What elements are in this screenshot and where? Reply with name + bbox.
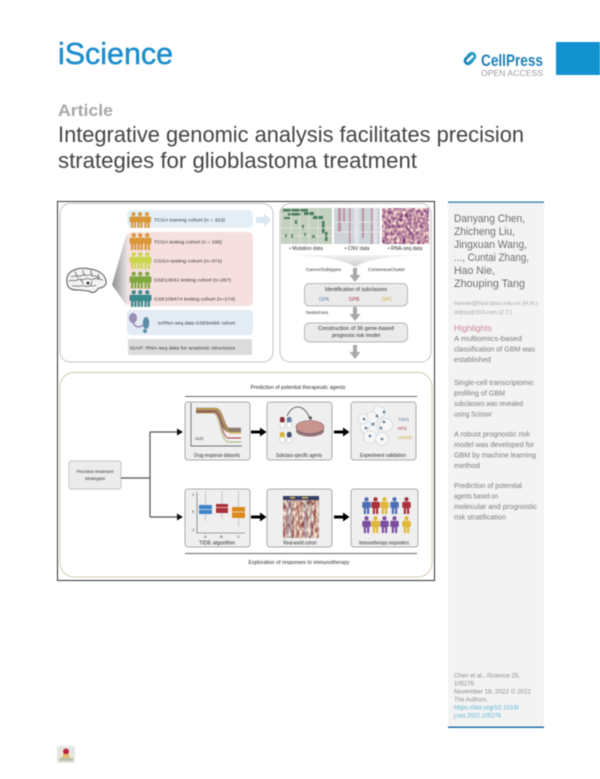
arrow <box>350 307 360 321</box>
TIDE boxplot <box>185 489 250 547</box>
branching connector arrows <box>121 428 183 520</box>
training cohort band <box>127 210 253 228</box>
highlights text: Single-cell transcriptomic <box>454 378 534 387</box>
highlights text: Prediction of potential <box>454 481 522 490</box>
highlights text: established <box>454 355 491 364</box>
scRNA-seq band <box>127 310 253 335</box>
real-world cohort: Real-world cohort <box>284 540 317 546</box>
highlights text: using Scissor <box>454 410 492 418</box>
omics data labels: • Mutation data <box>289 246 323 252</box>
risk model box: prognosis risk model <box>332 333 380 339</box>
block arrow to molecular data <box>256 213 271 227</box>
TIDE boxplot: 0 <box>192 509 195 514</box>
mutation data heatmap <box>281 208 332 244</box>
CellPress open access logo: OPEN ACCESS <box>481 68 543 78</box>
graphical abstract figure <box>58 202 434 580</box>
authors: Jingxuan Wang, <box>454 239 527 251</box>
correspondence emails: ddjtzp@163.com (Z.T.) <box>454 310 512 316</box>
RNA-seq data heatmap <box>382 208 429 244</box>
testing cohorts band: TCGA testing cohort (n = 195) <box>154 240 223 244</box>
title <box>58 122 524 173</box>
authors: Zhicheng Liu, <box>454 226 515 238</box>
title: Integrative genomic analysis facilitates precision <box>58 122 524 147</box>
highlights text: A robust prognostic risk <box>454 430 530 438</box>
arrow <box>334 428 350 436</box>
TIDE boxplot: B <box>220 534 223 539</box>
highlights heading: Highlights <box>454 324 492 333</box>
sidebar <box>448 202 544 728</box>
subclass-specific agents: Subclass-specific agents <box>276 453 322 459</box>
testing cohorts band: GSE108474 testing cohort (n=174) <box>154 296 236 302</box>
funnel wedge <box>112 232 127 306</box>
highlights text: subclasses was revealed <box>454 399 523 408</box>
authors: Danyang Chen, <box>454 213 525 225</box>
highlights text: method <box>454 461 480 470</box>
CellPress open access logo <box>465 51 543 78</box>
subclasses box: GPC <box>382 297 393 303</box>
experiment validation: NPS <box>398 426 407 431</box>
precision treatment box: Precision treatment <box>76 469 114 474</box>
merge funnel <box>281 255 429 267</box>
omics data labels <box>289 246 422 252</box>
authors: ..., Cuntai Zhang, <box>454 252 529 264</box>
method labels: ConsensusCluster <box>368 267 405 272</box>
panel: precision treatment strategies <box>60 372 432 577</box>
method labels: RandomForest <box>306 310 329 315</box>
citation: 105276 <box>454 680 474 688</box>
heading: immunotherapy: Exploration of responses to immunotherapy <box>248 560 350 566</box>
panel: data cohorts <box>60 204 273 362</box>
citation: j.isci.2022.105276 <box>453 712 501 720</box>
subclasses box: Identification of subclasses <box>325 287 388 293</box>
title: strategies for glioblastoma treatment <box>58 148 418 173</box>
icon: brain <box>67 268 106 292</box>
highlights text: classification of GBM was <box>454 344 535 354</box>
risk model box <box>304 323 408 342</box>
testing cohorts band: CGGA testing cohort (n=374) <box>154 258 223 264</box>
TIDE boxplot: C <box>237 534 240 539</box>
citation: Chen et al., iScience 25, <box>454 672 520 680</box>
method labels <box>306 267 405 315</box>
experiment validation <box>351 402 416 460</box>
immunotherapy responders <box>351 489 418 547</box>
arrow <box>350 268 360 282</box>
precision treatment box <box>69 461 121 489</box>
blue corner tab <box>556 42 600 75</box>
article label: Article <box>58 101 113 120</box>
scRNA-seq band: scRNA-seq data GSE84465 cohort <box>158 320 236 326</box>
subclasses box: GPA <box>319 297 330 303</box>
highlights text: GBM by machine learning <box>454 450 536 460</box>
omics data labels: • CNV data <box>345 246 370 252</box>
real-world cohort <box>267 489 332 547</box>
citation: November 18, 2022 © 2022 <box>454 688 531 696</box>
highlights text: profiling of GBM <box>454 388 505 398</box>
TIDE boxplot: 2 <box>192 492 195 497</box>
IGAP band <box>128 339 252 355</box>
TIDE boxplot: A <box>204 534 207 539</box>
subclasses box <box>304 284 408 306</box>
experiment validation: LM22B <box>398 435 412 440</box>
experiment validation: Experiment validation <box>360 453 406 459</box>
IGAP band: IGAP: RNA-seq data for anatomic structures <box>130 346 236 350</box>
risk model box: Construction of 36 gene-based <box>318 326 394 332</box>
heading: therapeutic agents: Prediction of potential therapeutic agents <box>250 385 346 391</box>
drug response datasets: AUC <box>195 436 204 441</box>
training cohort band: TCGA training cohort (n = 323) <box>154 218 226 222</box>
subclass-specific agents <box>267 402 332 460</box>
immunotherapy responders: Immunotherapy responders <box>359 540 409 546</box>
testing cohorts band <box>127 232 253 307</box>
testing cohorts band: GSE13041 testing cohort (n=267) <box>154 278 232 282</box>
TIDE boxplot: -2 <box>191 527 195 532</box>
journal logo: iScience: iScience <box>58 36 173 71</box>
correspondence emails: haonie@hust.tjmu.edu.cn (H.N.) <box>454 301 538 307</box>
citation: The Authors. <box>454 696 488 704</box>
omics data labels: • RNA-seq data <box>388 246 422 252</box>
subclasses box: GPB <box>349 297 360 303</box>
arrow <box>350 345 360 359</box>
citation <box>453 672 531 720</box>
highlights text: risk stratification <box>454 512 506 522</box>
CellPress open access logo: CellPress <box>481 51 543 70</box>
authors: Hao Nie, <box>454 265 495 277</box>
icon: check for updates <box>57 746 75 763</box>
drug response datasets <box>185 402 250 460</box>
authors: Zhouping Tang <box>454 278 525 290</box>
highlights text: molecular and prognostic <box>454 502 537 511</box>
highlights text: model was developed for <box>454 440 534 449</box>
precision treatment box: strategies <box>85 476 106 481</box>
highlights text: agents based on <box>454 492 498 500</box>
arrow <box>251 512 266 522</box>
authors <box>454 213 529 290</box>
panel: molecular classification workflow <box>280 204 431 362</box>
TIDE boxplot: TIDE algorithm <box>199 540 235 546</box>
highlights text <box>454 334 537 522</box>
citation: https://doi.org/10.1016/ <box>454 704 519 712</box>
experiment validation: TWIG <box>398 417 410 422</box>
correspondence emails <box>454 301 538 316</box>
arrow <box>334 512 350 522</box>
highlights text: A multiomics-based <box>454 334 522 343</box>
arrow <box>251 428 266 436</box>
icon: CellPress link <box>465 53 475 64</box>
method labels: CancerSubtypes <box>306 267 342 272</box>
drug response datasets: Drug response datasets <box>194 453 240 459</box>
CNV data heatmap <box>334 208 380 244</box>
